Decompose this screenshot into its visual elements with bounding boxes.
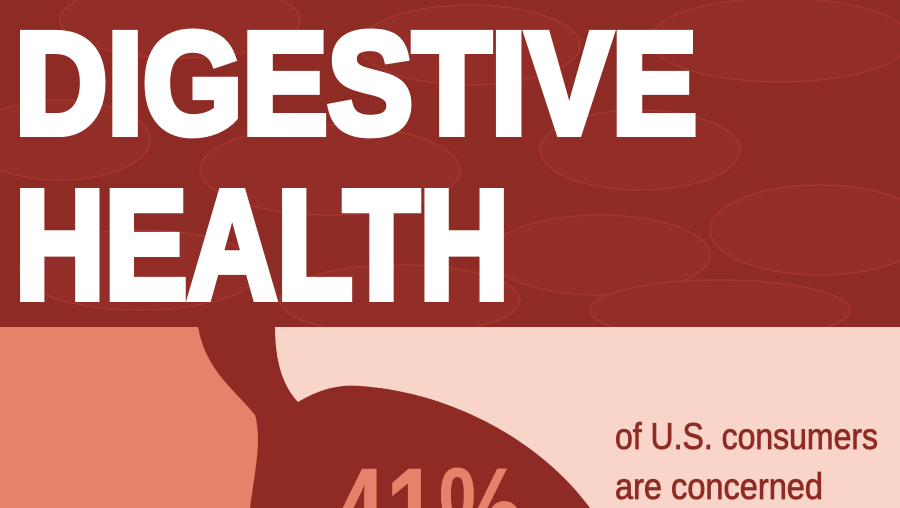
text block: description: are concerned (615, 466, 823, 507)
title: DIGESTIVE: DIGESTIVE (15, 3, 697, 164)
icon: stomach shape (198, 326, 590, 508)
panel: header band (0, 0, 900, 340)
title: HEALTH: HEALTH (15, 159, 509, 331)
panel: left salmon column (0, 326, 275, 508)
text block: description (615, 416, 878, 507)
